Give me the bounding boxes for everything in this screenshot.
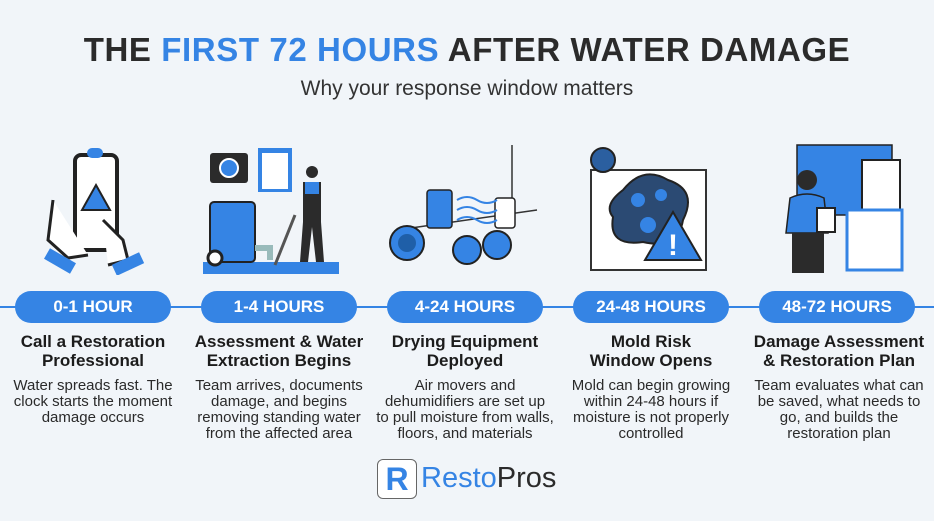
icon: damage assessment: [785, 144, 904, 273]
pill: 4-24 hours: [387, 291, 543, 323]
icon: phone alert: [44, 148, 144, 275]
icon: water extraction: [203, 148, 339, 274]
step 4 text: [572, 332, 730, 442]
step 5 text: [754, 332, 924, 442]
step 5 text: go, and builds the: [780, 409, 898, 426]
pill: 24-48 hours: 24-48 HOURS: [596, 297, 706, 316]
step 4 text: Mold Risk: [611, 332, 691, 351]
logo text: RestoPros: [421, 462, 556, 494]
pill: 4-24 hours: 4-24 HOURS: [415, 297, 515, 316]
step 4 text: Mold can begin growing: [572, 377, 730, 394]
step 3 text: Deployed: [427, 351, 503, 370]
pill: 48-72 hours: [759, 291, 915, 323]
step 1 text: Call a Restoration: [21, 332, 165, 351]
step 3 text: Drying Equipment: [392, 332, 538, 351]
icon: mold risk: [590, 147, 707, 271]
step 5 text: Team evaluates what can: [754, 377, 924, 394]
step 4 text: within 24-48 hours if: [584, 393, 718, 410]
step 2 text: removing standing water: [197, 409, 361, 426]
icon: mold risk: !: [668, 229, 678, 262]
step 3 text: Air movers and: [415, 377, 515, 394]
pill: 24-48 hours: [573, 291, 729, 323]
pill: 48-72 hours: 48-72 HOURS: [782, 297, 892, 316]
pill: 0-1 hour: 0-1 HOUR: [53, 297, 133, 316]
step 5 text: & Restoration Plan: [763, 351, 915, 370]
step 4 text: controlled: [618, 425, 684, 442]
step 3 text: dehumidifiers are set up: [385, 393, 545, 410]
timeline line: [0, 306, 934, 308]
title: THE FIRST 72 HOURS AFTER WATER DAMAGE: [84, 31, 850, 68]
icon: logo mark: [377, 459, 417, 499]
step 2 text: Extraction Begins: [207, 351, 351, 370]
step 1 text: Water spreads fast. The: [13, 377, 173, 394]
pill: 0-1 hour: [15, 291, 171, 323]
subtitle: Why your response window matters: [301, 77, 633, 100]
pill: 1-4 hours: 1-4 HOURS: [234, 297, 324, 316]
step 1 text: Professional: [42, 351, 144, 370]
icon: drying equipment: [389, 145, 538, 265]
step 4 text: Window Opens: [590, 351, 712, 370]
step 2 text: from the affected area: [206, 425, 352, 442]
step 1 text: clock starts the moment: [14, 393, 172, 410]
step 2 text: Team arrives, documents: [195, 377, 363, 394]
step 1 text: damage occurs: [42, 409, 144, 426]
step 5 text: restoration plan: [787, 425, 891, 442]
step 3 text: to pull moisture from walls,: [376, 409, 554, 426]
step 5 text: be saved, what needs to: [758, 393, 920, 410]
step 2 text: damage, and begins: [211, 393, 347, 410]
step 4 text: moisture is not properly: [573, 409, 729, 426]
step 2 text: Assessment & Water: [195, 332, 363, 351]
step 3 text: floors, and materials: [397, 425, 533, 442]
icon: logo mark: R: [385, 461, 409, 497]
step 2 text: [195, 332, 363, 442]
step 1 text: [13, 332, 173, 426]
logo: [377, 459, 556, 499]
step 3 text: [376, 332, 554, 442]
pill: 1-4 hours: [201, 291, 357, 323]
step 5 text: Damage Assessment: [754, 332, 924, 351]
